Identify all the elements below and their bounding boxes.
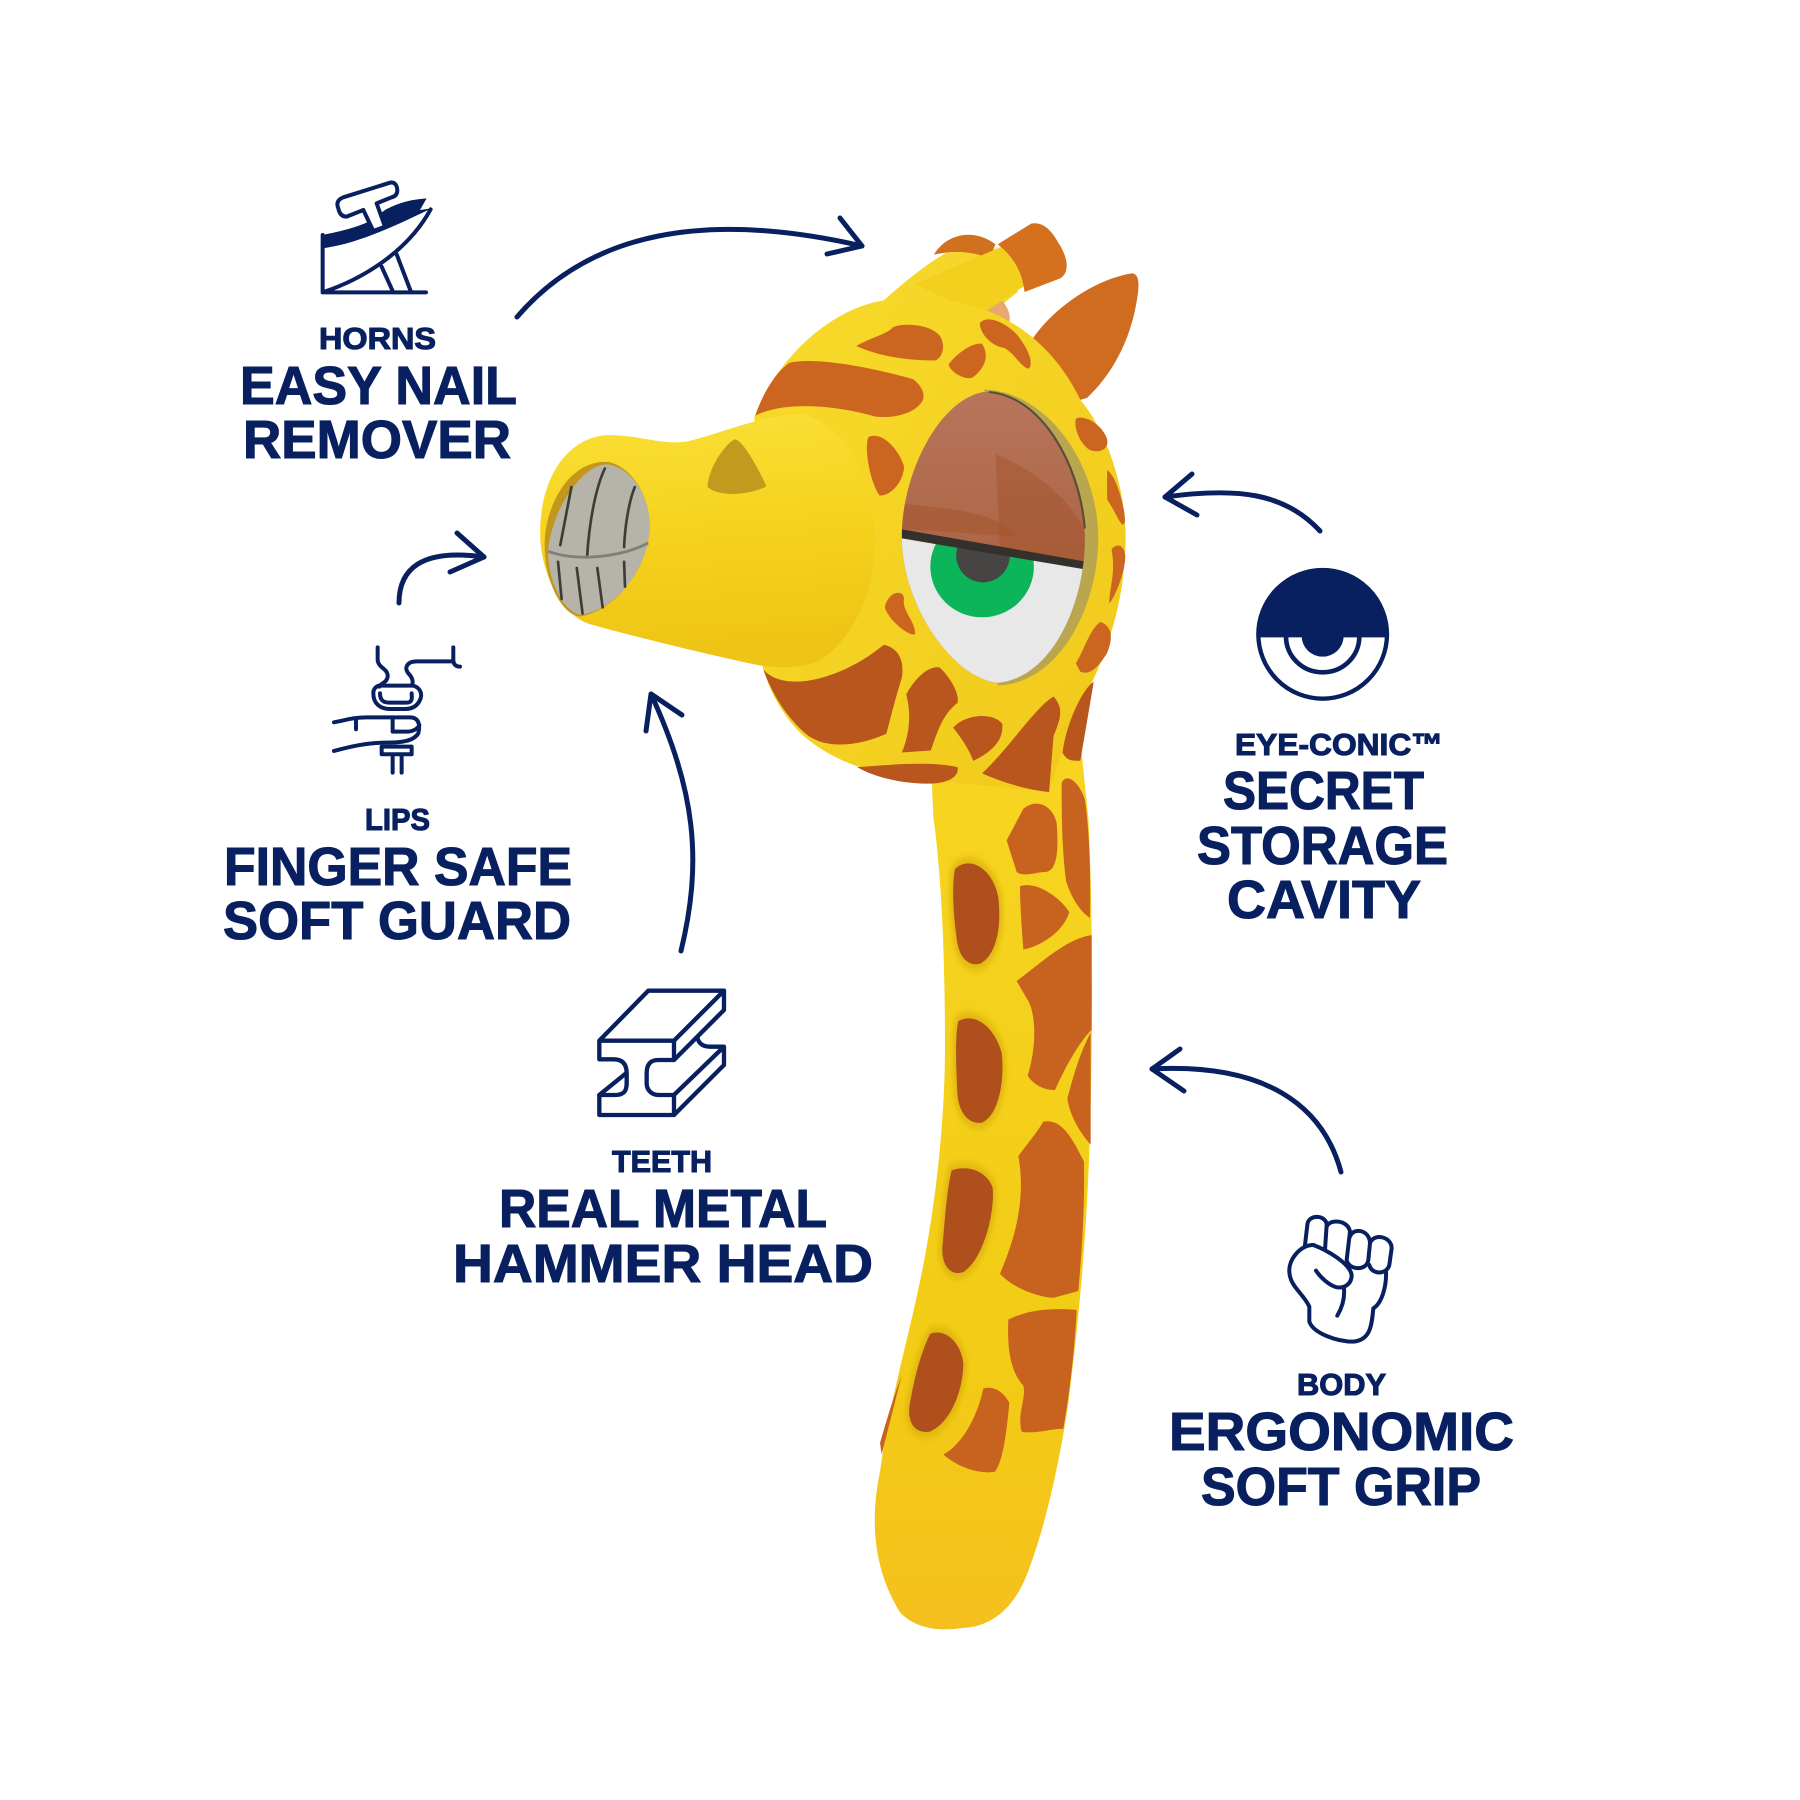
label: body: SOFT GRIP xyxy=(1201,1457,1481,1517)
label: eye-conic: CAVITY xyxy=(1227,870,1421,930)
icon: steel beam xyxy=(599,991,724,1115)
label: body xyxy=(1169,1367,1514,1517)
arrow: horns xyxy=(517,218,862,317)
head, horns, ear, snout and eye xyxy=(540,223,1138,792)
label: eye-conic: STORAGE xyxy=(1197,816,1448,876)
label: lips: LIPS xyxy=(365,802,430,837)
neck and handle xyxy=(875,737,1092,1629)
label: horns: HORNS xyxy=(319,321,436,356)
nostril xyxy=(708,439,767,494)
iris xyxy=(930,544,1034,618)
pupil xyxy=(956,548,1010,582)
icon: fist xyxy=(1289,1217,1392,1342)
head spots xyxy=(755,319,1125,673)
label: horns xyxy=(240,321,517,470)
label: eye-conic xyxy=(1197,727,1448,930)
mouth with metal teeth xyxy=(545,462,650,616)
label: horns: EASY NAIL xyxy=(240,356,517,416)
label: body: BODY xyxy=(1297,1367,1386,1402)
ear xyxy=(1027,273,1138,404)
label: eye-conic: SECRET xyxy=(1223,761,1424,821)
icon: nail remover xyxy=(322,183,432,292)
label: lips: SOFT GUARD xyxy=(223,891,571,951)
label: lips xyxy=(223,802,572,951)
snout xyxy=(540,414,875,667)
head sphere xyxy=(754,298,1126,792)
label: body: ERGONOMIC xyxy=(1169,1402,1514,1462)
label: teeth xyxy=(453,1144,873,1294)
icon: finger guard xyxy=(334,647,460,773)
label: horns: REMOVER xyxy=(243,410,511,470)
giraffe hammer illustration xyxy=(540,223,1138,1629)
label: teeth: HAMMER HEAD xyxy=(453,1234,873,1294)
arrow: teeth xyxy=(646,694,693,951)
label: lips: FINGER SAFE xyxy=(224,837,572,897)
arrow: lips xyxy=(399,533,484,603)
label: teeth: REAL METAL xyxy=(499,1179,827,1239)
label: eye-conic: EYE-CONIC™ xyxy=(1235,727,1443,762)
arrow: body xyxy=(1152,1049,1341,1172)
arrow: eye xyxy=(1165,474,1320,531)
label: teeth: TEETH xyxy=(612,1144,712,1179)
eye xyxy=(893,383,1103,690)
left horn xyxy=(879,235,1018,317)
right horn xyxy=(915,223,1067,323)
icon: eye xyxy=(1258,570,1387,699)
